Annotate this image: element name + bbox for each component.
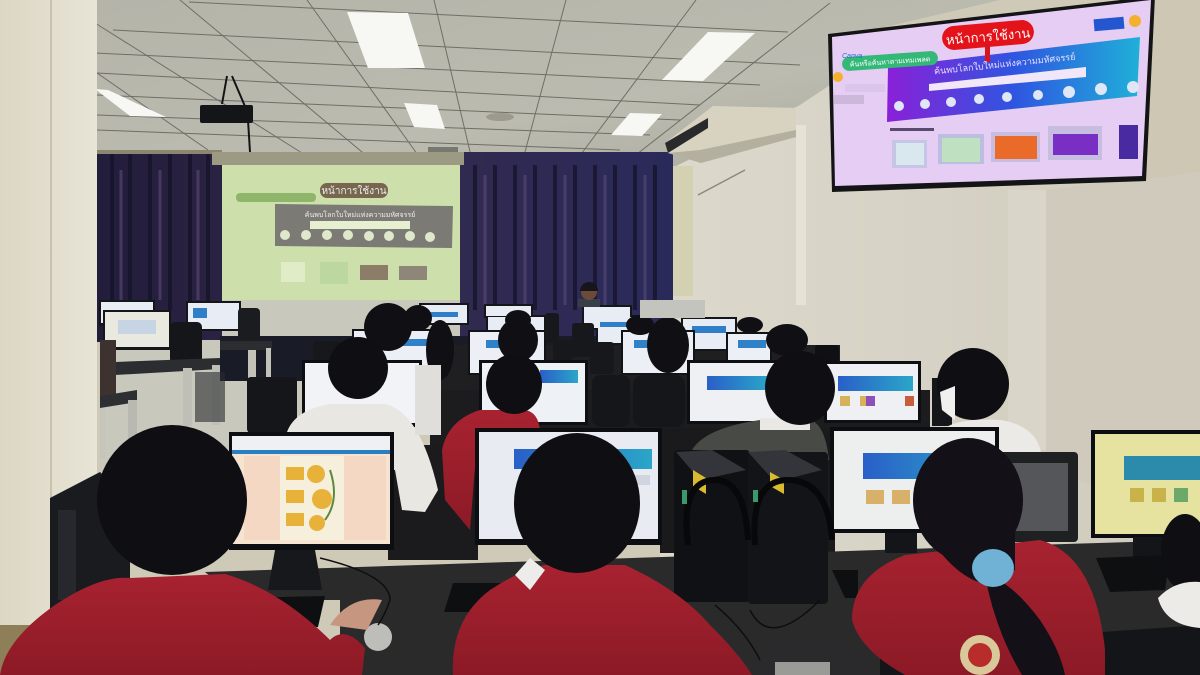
front monitor: flower document: [229, 432, 394, 590]
conduit: [698, 125, 801, 305]
wall TV: ค้นพบโลกใบใหม่แห่งความมหัศจรรย์: [933, 51, 1076, 76]
student: masked: [937, 348, 1041, 452]
scrunchie: [972, 549, 1014, 587]
front monitor: right: [830, 427, 999, 553]
window column: [673, 166, 693, 296]
screen callout: หน้าการใช้งาน: [321, 185, 387, 197]
TV green search tag: [842, 51, 938, 71]
ceiling lights: [95, 12, 755, 166]
ceiling: [95, 0, 1000, 168]
right wall column: [1008, 0, 1200, 520]
front PC towers with headsets: [674, 450, 832, 604]
student far right edge: [1158, 514, 1200, 628]
second row monitors: [302, 360, 921, 427]
instructor: [578, 282, 600, 307]
front monitor: center: [475, 428, 662, 545]
projector: [200, 76, 253, 152]
left PC tower: [50, 472, 130, 610]
front monitor: far right: [1091, 430, 1200, 557]
rear wall band: [220, 336, 673, 381]
air conditioner: [665, 106, 796, 163]
student: red shirt: [442, 354, 542, 530]
school emblem: [960, 635, 1000, 675]
small speakers and towers middle: [313, 300, 705, 374]
student front center: [453, 433, 752, 675]
lower mid dark base: [388, 428, 835, 560]
back row monitors: [99, 300, 737, 351]
student: dark jacket: [692, 351, 835, 460]
keyboards: [237, 555, 1170, 628]
projection screen: ค้นพบโลกใบใหม่แห่งความมหัศจรรย์: [305, 210, 415, 219]
mouse and cables: [320, 558, 820, 660]
left pillar: [0, 0, 100, 675]
back row heads: [364, 303, 839, 380]
left desks: [100, 308, 272, 458]
mid room dark base: [440, 345, 840, 445]
front desk: [205, 540, 1200, 675]
wall TV: Canva: [842, 53, 862, 60]
student front left: [0, 425, 382, 675]
student: white shirt back: [287, 337, 441, 512]
third row monitors: [352, 329, 772, 375]
projection screen: [212, 152, 464, 336]
second row towers: [247, 375, 952, 433]
curtain: [97, 150, 673, 342]
wall TV: [828, 0, 1155, 192]
student front right with ponytail: [852, 438, 1105, 675]
TV callout: หน้าการใช้งาน: [945, 25, 1031, 48]
TV green search tag: ค้นหรือค้นหาตามเทมเพลต: [850, 55, 931, 69]
right wall: [660, 80, 1200, 560]
rear office chair: [998, 452, 1078, 542]
floor back left: [100, 340, 300, 470]
TV callout: [941, 19, 1035, 51]
second row desk: [430, 390, 930, 450]
